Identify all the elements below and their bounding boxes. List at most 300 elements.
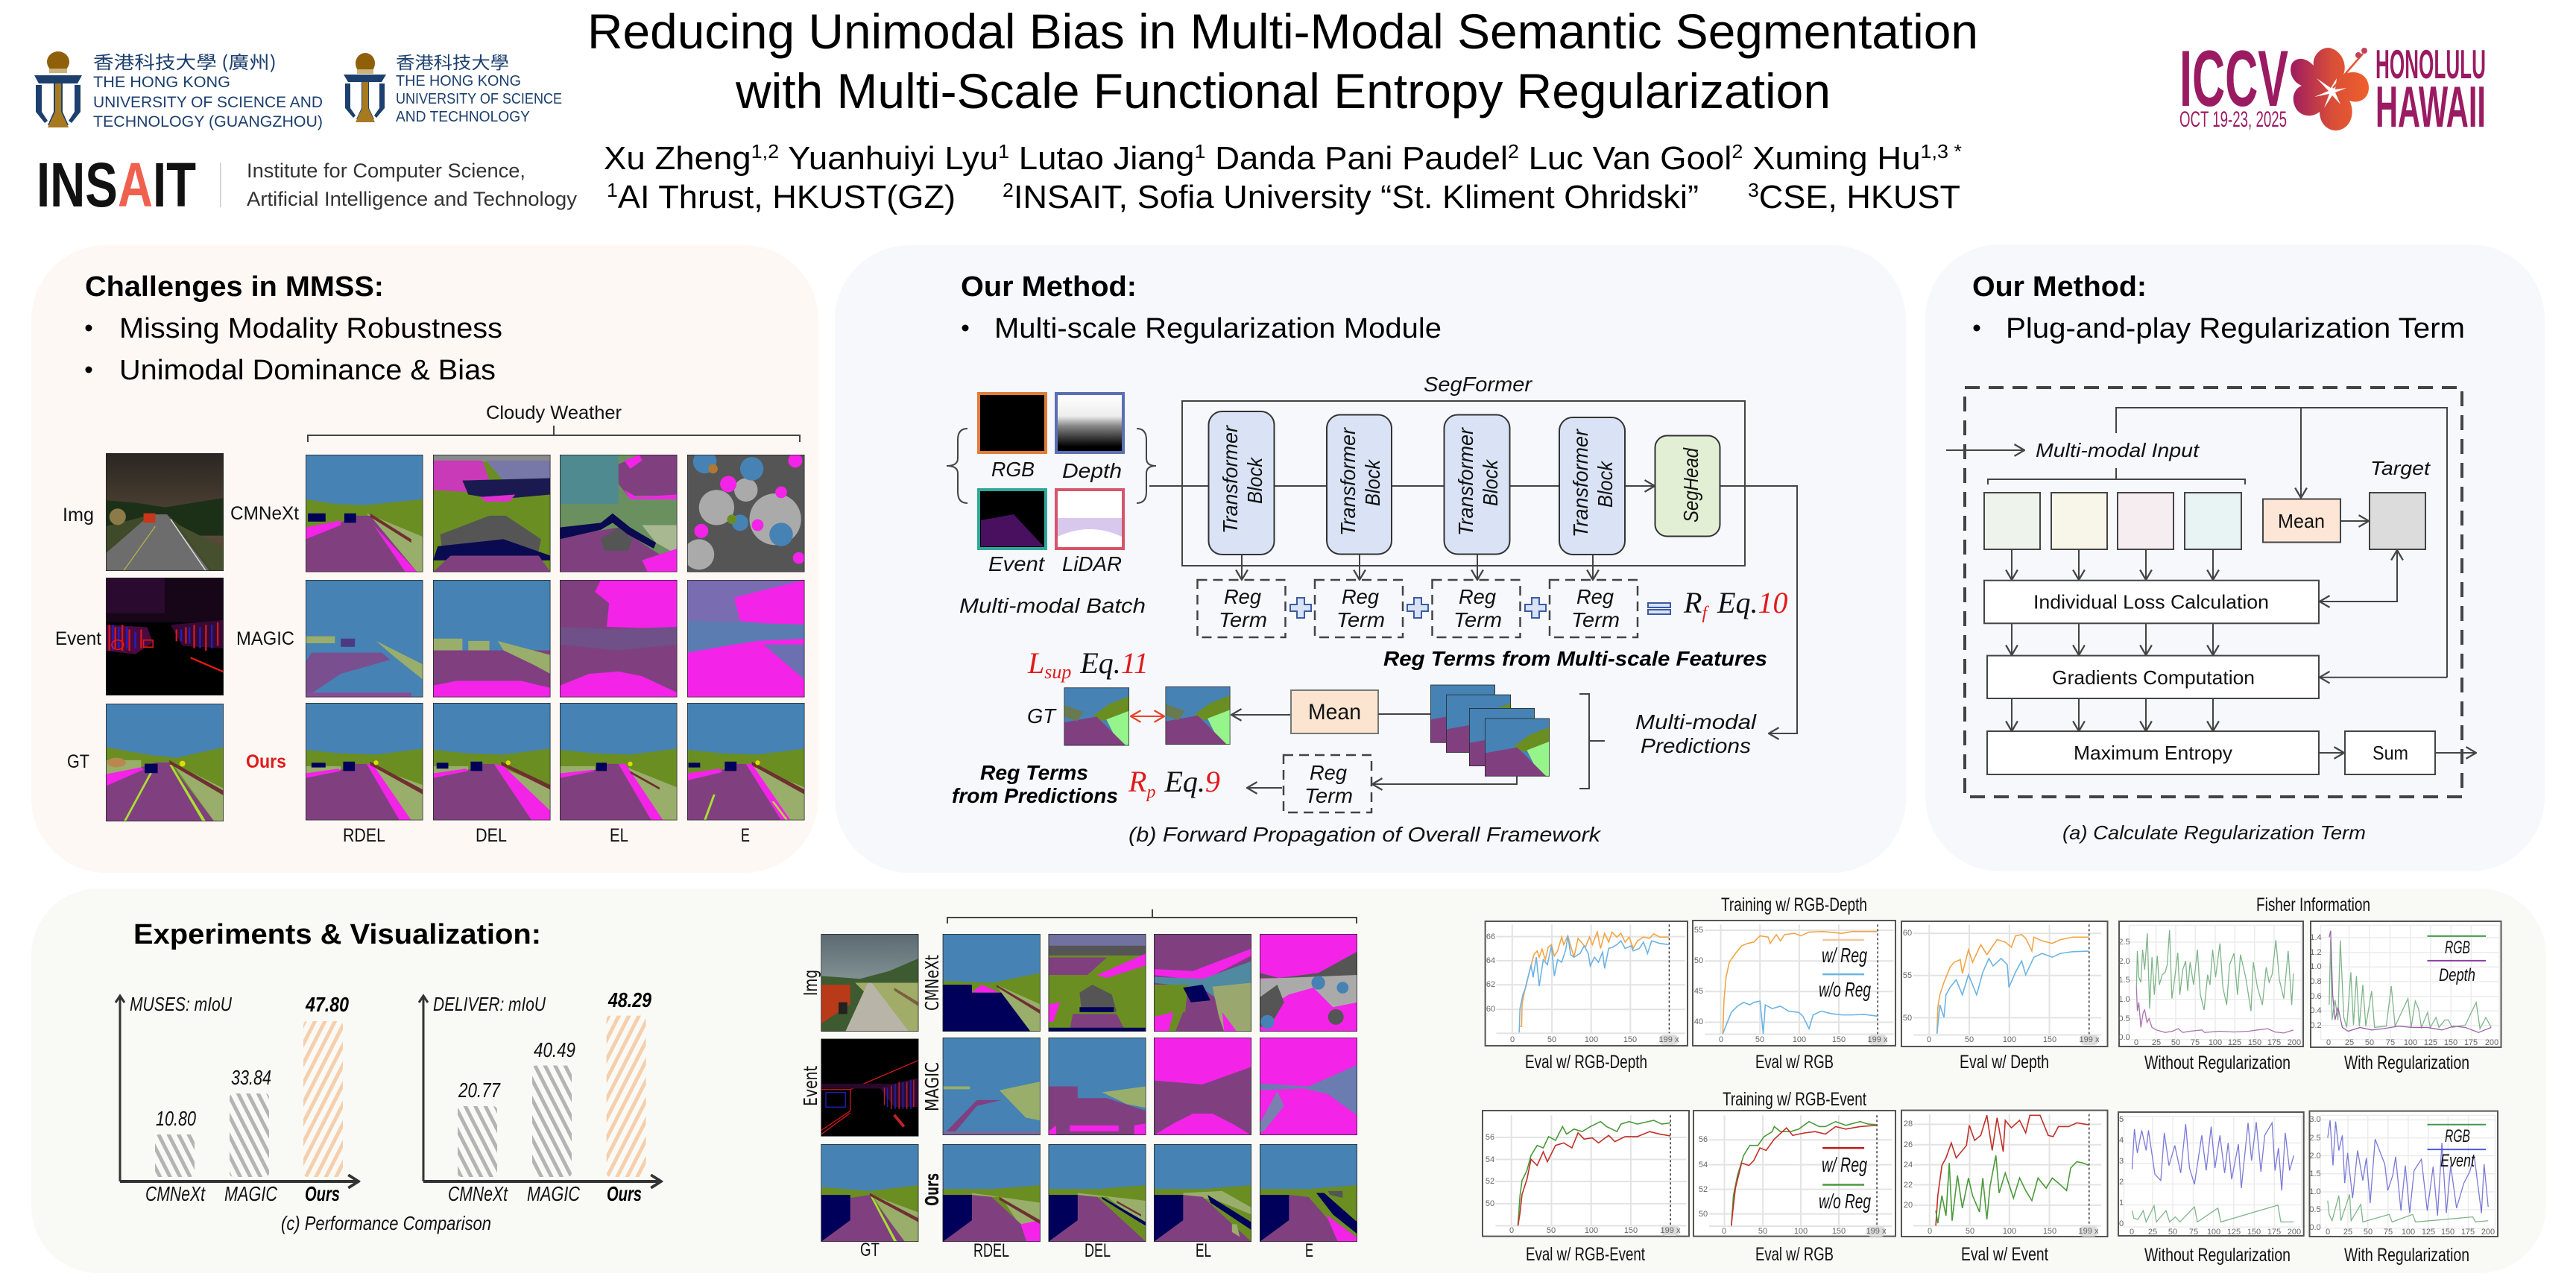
chart: Fisher with regularization, RGB-Depth: 125 bbox=[2424, 1038, 2437, 1047]
equation: L_sup Eq.11: Eq. bbox=[1079, 646, 1121, 680]
chart: eval Depth: 150 bbox=[2043, 1035, 2056, 1044]
bar chart: MUSES mIoU: 33.84 bbox=[231, 1066, 271, 1089]
chart: Fisher with regularization, RGB-Event: 50 bbox=[2364, 1228, 2373, 1237]
segmentation: Ours RDEL bbox=[306, 703, 423, 820]
chart: eval RGB-Depth: 199 x bbox=[1659, 1035, 1679, 1044]
chart: Fisher with regularization, RGB-Depth: 75 bbox=[2386, 1038, 2395, 1047]
authors and affiliations: 2 bbox=[1731, 140, 1743, 162]
box: sum bbox=[2345, 731, 2435, 774]
chart: eval RGB-Event: 56 bbox=[1486, 1133, 1494, 1142]
segmentation: Ours DEL bbox=[1048, 1144, 1146, 1242]
thumbnail: GT bbox=[1064, 687, 1129, 745]
caption c: (c) Performance Comparison bbox=[281, 1212, 491, 1234]
transformer block 3 bbox=[1445, 414, 1510, 555]
equation: L_sup Eq.11: 11 bbox=[1121, 646, 1149, 680]
chart: Fisher with regularization, RGB-Depth: 0.6 bbox=[2310, 992, 2322, 1001]
chart: Fisher with regularization, RGB-Event: 100 bbox=[2402, 1228, 2415, 1237]
reg term 1 bbox=[1197, 580, 1285, 637]
chart: eval RGB-Event: 100 bbox=[1585, 1226, 1598, 1235]
authors and affiliations: 3 bbox=[1748, 179, 1759, 201]
chart: Fisher with regularization, RGB-Depth: 1.2 bbox=[2310, 948, 2322, 957]
chart: Fisher without regularization, RGB-Event: 0 bbox=[2119, 1219, 2124, 1228]
segmentation: CMNeXt RDEL bbox=[306, 455, 423, 572]
chart captions: RGB-Event row: Eval w/ RGB bbox=[1755, 1244, 1834, 1265]
segmentation: Ours EL bbox=[560, 703, 677, 820]
chart: Fisher without regularization, RGB-Depth: 125 bbox=[2228, 1038, 2241, 1047]
transformer block 1 bbox=[1209, 411, 1275, 555]
column labels: DEL bbox=[476, 825, 507, 846]
chart: eval RGB, RGB-Depth training: 0 bbox=[1719, 1035, 1723, 1044]
feature reg terms row: Reg Terms from Multi-scale Features bbox=[1383, 647, 1767, 670]
chart: Fisher without regularization, RGB-Depth: 0.5 bbox=[2118, 1014, 2130, 1023]
segmentation: MAGIC E bbox=[687, 580, 805, 698]
chart: eval RGB, RGB-Event training: 0 bbox=[1722, 1227, 1726, 1236]
title: Reducing Unimodal Bias in Multi-Modal Semantic Segmentation bbox=[587, 4, 1978, 59]
chart: eval RGB, RGB-Event training: 100 bbox=[1794, 1227, 1808, 1236]
logo: HKUST (Guangzhou) bbox=[34, 48, 323, 130]
equation: R_p Eq.9: p bbox=[1145, 783, 1155, 802]
reg term 1: Reg bbox=[1224, 585, 1261, 608]
chart: Fisher without regularization, RGB-Event: 25 bbox=[2148, 1228, 2157, 1237]
chart: eval Event: 199 x bbox=[2079, 1227, 2099, 1236]
bullet list: challenges: Missing Modality Robustness bbox=[119, 313, 502, 344]
equation: R_f Eq.10: R bbox=[1684, 586, 1702, 619]
chart: eval RGB, RGB-Depth training: 199 x bbox=[1868, 1035, 1888, 1044]
row labels: modalities and methods: Ours bbox=[246, 751, 286, 772]
row labels: modalities and methods: GT bbox=[67, 751, 89, 772]
input: event bbox=[979, 490, 1046, 575]
stacked multi-modal predictions bbox=[1430, 685, 1757, 789]
row labels: modalities and methods: Img bbox=[63, 505, 94, 525]
authors and affiliations: 2 bbox=[1508, 140, 1519, 162]
chart captions: RGB-Event row: Eval w/ RGB-Event bbox=[1526, 1244, 1645, 1265]
equation: R_f Eq.10: Eq. bbox=[1717, 586, 1758, 619]
reg term 3 bbox=[1433, 580, 1521, 637]
authors and affiliations: CSE, HKUST bbox=[1759, 179, 1960, 215]
bullet: plug-and-play term: Plug-and-play Regularization Term bbox=[2006, 313, 2465, 344]
chart: eval RGB, RGB-Depth training: 150 bbox=[1832, 1035, 1846, 1044]
chart: Fisher with regularization, RGB-Event: 0.5 bbox=[2309, 1205, 2321, 1214]
row labels: modalities and methods: Event bbox=[55, 628, 101, 649]
chart: eval Event: 150 bbox=[2043, 1227, 2056, 1236]
chart: Fisher without regularization, RGB-Depth: 2.5 bbox=[2118, 938, 2130, 947]
multi-modal input label and arrow: Multi-modal Input bbox=[2036, 439, 2200, 461]
chart: eval Event: 24 bbox=[1904, 1161, 1913, 1169]
chart: Fisher without regularization, RGB-Depth: 25 bbox=[2152, 1038, 2161, 1047]
heading: training with RGB-Event: Training w/ RGB-Event bbox=[1723, 1089, 1866, 1110]
rotated row labels bbox=[800, 955, 943, 1206]
chart: eval Event bbox=[1901, 1111, 2108, 1237]
prediction reg term bbox=[1247, 755, 1517, 812]
authors and affiliations: 1 bbox=[607, 179, 618, 201]
caption b: (b) Forward Propagation of Overall Framework bbox=[1128, 823, 1602, 846]
heading: training with RGB-Depth: Training w/ RGB-Depth bbox=[1721, 894, 1867, 915]
chart: Fisher without regularization, RGB-Event: 150 bbox=[2247, 1228, 2261, 1237]
bar chart: DELIVER mIoU: 40.49 bbox=[534, 1038, 575, 1061]
braces bbox=[947, 429, 1156, 503]
chart: Fisher without regularization, RGB-Event: 125 bbox=[2227, 1228, 2241, 1237]
logo: ICCV Honolulu Hawaii: OCT 19-23, 2025 bbox=[2179, 107, 2287, 132]
title bbox=[587, 4, 1978, 119]
logo: HKUST: THE HONG KONG bbox=[396, 73, 521, 89]
chart: eval RGB, RGB-Depth training: 50 bbox=[1755, 1035, 1764, 1044]
segmentation: MAGIC RDEL bbox=[306, 580, 423, 698]
multi-modal batch inputs: Multi-modal Batch bbox=[959, 594, 1146, 617]
rotated row labels: MAGIC bbox=[921, 1062, 943, 1111]
chart: eval Event: 22 bbox=[1904, 1181, 1913, 1190]
chart: eval Event: 0 bbox=[1928, 1227, 1932, 1236]
chart: eval RGB-Depth: 60 bbox=[1486, 1005, 1495, 1014]
authors and affiliations: 1 bbox=[1194, 140, 1205, 162]
chart: eval RGB-Depth: 64 bbox=[1486, 956, 1495, 965]
box: mean: Mean bbox=[2278, 510, 2325, 532]
chart captions: Fisher bottom row: With Regularization bbox=[2344, 1245, 2469, 1266]
SegHead block bbox=[1655, 435, 1720, 537]
box: sum: Sum bbox=[2373, 742, 2408, 764]
rotated row labels: Ours bbox=[921, 1173, 943, 1206]
GT and prediction comparison bbox=[1027, 686, 1430, 745]
chart: eval RGB, RGB-Event training: 199 x bbox=[1866, 1227, 1887, 1236]
reg term 2 bbox=[1315, 580, 1403, 637]
chart: Fisher without regularization, RGB-Event: 100 bbox=[2207, 1228, 2220, 1237]
caption a: (a) Calculate Regularization Term bbox=[2062, 821, 2366, 844]
box: target: Target bbox=[2370, 457, 2431, 479]
reg term 2: Term bbox=[1336, 608, 1385, 631]
chart: eval RGB-Event bbox=[1483, 1111, 1689, 1237]
panel: our method, multi-scale regularization bbox=[835, 245, 1906, 873]
chart: Fisher with regularization, RGB-Event: 1.5 bbox=[2309, 1169, 2321, 1178]
heading: challenges: Challenges in MMSS: bbox=[85, 271, 384, 303]
chart: eval RGB, RGB-Event training: 50 bbox=[1699, 1210, 1708, 1219]
chart: Fisher with regularization, RGB-Depth: 0.8 bbox=[2310, 977, 2322, 986]
bar chart: DELIVER mIoU bbox=[419, 988, 661, 1205]
logo: INSAIT: Artificial Intelligence and Technology bbox=[247, 188, 577, 210]
chart: eval RGB, RGB-Depth training: 50 bbox=[1694, 956, 1703, 965]
column labels: visualization grid: E bbox=[1305, 1240, 1313, 1261]
chart: Fisher without regularization, RGB-Depth: 150 bbox=[2248, 1038, 2261, 1047]
chart: Fisher with regularization, RGB-Event: 200 bbox=[2481, 1228, 2495, 1237]
chart: eval RGB-Depth: 66 bbox=[1486, 932, 1495, 941]
column labels: visualization grid: DEL bbox=[1085, 1240, 1111, 1261]
authors and affiliations: 1,2 bbox=[751, 140, 779, 162]
segmentation: CMNeXt DEL bbox=[433, 455, 550, 572]
bar chart: DELIVER mIoU: MAGIC bbox=[527, 1182, 581, 1205]
chart: Fisher without regularization, RGB-Depth: 175 bbox=[2267, 1038, 2281, 1047]
chart: eval RGB, RGB-Depth training: w/ Reg bbox=[1822, 944, 1867, 967]
transformer block 4: Transformer bbox=[1569, 428, 1592, 537]
chart: eval Depth bbox=[1901, 921, 2108, 1046]
column labels: visualization grid: GT bbox=[860, 1240, 880, 1260]
chart: Fisher with regularization, RGB-Depth: 175 bbox=[2464, 1038, 2478, 1047]
box: mean bbox=[1291, 690, 1378, 733]
chart: eval Event: 26 bbox=[1904, 1140, 1913, 1149]
chart: eval RGB-Event: 50 bbox=[1547, 1226, 1556, 1235]
chart: eval RGB-Event: 199 x bbox=[1661, 1226, 1681, 1235]
bar chart: MUSES mIoU bbox=[116, 993, 359, 1205]
chart: eval RGB, RGB-Depth training: 45 bbox=[1694, 987, 1703, 996]
authors and affiliations: INSAIT, Sofia University “St. Kliment Ohridski” bbox=[1014, 179, 1699, 215]
column labels: visualization grid bbox=[860, 1240, 1313, 1261]
chart: eval RGB-Event: 0 bbox=[1509, 1226, 1514, 1235]
chart: Fisher with regularization, RGB-Event: Event bbox=[2440, 1151, 2475, 1171]
heading: our method: Our Method: bbox=[1972, 271, 2147, 303]
chart: eval RGB-Depth: 0 bbox=[1510, 1035, 1515, 1044]
input: event: Event bbox=[988, 552, 1045, 575]
chart: eval Depth: 50 bbox=[1965, 1035, 1974, 1044]
label: reg terms from predictions bbox=[952, 761, 1118, 807]
chart: Fisher with regularization, RGB-Event bbox=[2309, 1111, 2498, 1237]
reg term 2: Reg bbox=[1342, 585, 1379, 608]
chart: eval Depth: 55 bbox=[1903, 971, 1912, 980]
chart: Fisher without regularization, RGB-Event: 2 bbox=[2119, 1178, 2124, 1187]
rotated row labels: CMNeXt bbox=[921, 955, 943, 1011]
multi-modal batch inputs bbox=[947, 394, 1156, 617]
segmentation: Ours DEL bbox=[433, 703, 550, 820]
heading: Fisher information: Fisher Information bbox=[2256, 894, 2370, 915]
SegFormer backbone bbox=[1149, 373, 1797, 733]
chart: eval RGB-Event: 52 bbox=[1486, 1177, 1494, 1186]
chart: eval RGB-Event: 150 bbox=[1624, 1226, 1638, 1235]
chart: eval Depth: 60 bbox=[1903, 929, 1912, 938]
chart: eval RGB-Event: 54 bbox=[1486, 1155, 1494, 1164]
bracket: cloudy weather bbox=[308, 402, 800, 442]
bullet list: challenges bbox=[85, 313, 502, 386]
SegHead block: SegHead bbox=[1679, 447, 1702, 523]
segmentation: MAGIC E bbox=[1260, 1038, 1357, 1135]
equation: L_sup Eq.11: sup bbox=[1044, 661, 1071, 683]
dashed module frame bbox=[1965, 388, 2462, 797]
stacked multi-modal predictions: Multi-modal bbox=[1635, 710, 1757, 733]
multi-modal input label and arrow bbox=[1946, 408, 2447, 678]
transformer block 2: Block bbox=[1361, 458, 1384, 506]
equation: R_f Eq.10: 10 bbox=[1758, 586, 1788, 619]
chart: Fisher without regularization, RGB-Depth bbox=[2118, 921, 2303, 1047]
chart: Fisher without regularization, RGB-Depth: 50 bbox=[2171, 1038, 2180, 1047]
authors and affiliations: Xu Zheng bbox=[604, 140, 746, 177]
chart: eval Depth: 50 bbox=[1903, 1014, 1912, 1023]
logo: HKUST bbox=[344, 48, 562, 125]
segmentation: Ours RDEL bbox=[943, 1144, 1041, 1242]
chart: Fisher without regularization, RGB-Event: 75 bbox=[2189, 1228, 2198, 1237]
plus and equals icons bbox=[1290, 598, 1670, 618]
box: maximum entropy: Maximum Entropy bbox=[2074, 742, 2232, 764]
SegFormer backbone: SegFormer bbox=[1424, 373, 1533, 396]
chart: Fisher with regularization, RGB-Event: 150 bbox=[2441, 1228, 2455, 1237]
chart: Fisher with regularization, RGB-Depth: RGB bbox=[2445, 938, 2470, 958]
reg term 4: Reg bbox=[1576, 585, 1614, 608]
chart: Fisher with regularization, RGB-Depth: 1.0 bbox=[2310, 962, 2322, 971]
chart: Fisher without regularization, RGB-Depth: 200 bbox=[2288, 1038, 2301, 1047]
chart: eval RGB-Depth: 150 bbox=[1623, 1035, 1637, 1044]
chart: Fisher with regularization, RGB-Event: 0.0 bbox=[2309, 1223, 2321, 1232]
authors and affiliations bbox=[604, 140, 1962, 215]
segmentation: Ours E bbox=[1260, 1144, 1357, 1242]
chart: eval RGB, RGB-Event training: 50 bbox=[1758, 1227, 1767, 1236]
chart captions: RGB-Depth row bbox=[1525, 1052, 2049, 1073]
bar chart: DELIVER mIoU: Ours bbox=[607, 1182, 642, 1205]
logo: HKUST (Guangzhou): UNIVERSITY OF SCIENCE AND bbox=[93, 94, 323, 111]
chart captions: RGB-Event row: Eval w/ Event bbox=[1961, 1244, 2048, 1265]
authors and affiliations: AI Thrust, HKUST(GZ) bbox=[618, 179, 956, 215]
chart: Fisher with regularization, RGB-Event: 3.0 bbox=[2309, 1115, 2321, 1124]
panel: experiments and visualization bbox=[31, 888, 2546, 1273]
chart: Fisher with regularization, RGB-Depth: 200 bbox=[2485, 1038, 2498, 1047]
panel: challenges in MMSS bbox=[31, 245, 818, 873]
chart: Fisher with regularization, RGB-Depth: 0 bbox=[2326, 1038, 2331, 1047]
stacked multi-modal predictions: Predictions bbox=[1641, 734, 1751, 757]
chart: eval Event: 20 bbox=[1904, 1201, 1913, 1210]
segmentation: Ours E bbox=[687, 703, 805, 820]
chart captions: Fisher top row: With Regularization bbox=[2344, 1052, 2469, 1073]
chart: Fisher without regularization, RGB-Depth: 75 bbox=[2191, 1038, 2200, 1047]
box: mean: Mean bbox=[1308, 700, 1361, 724]
chart: Fisher without regularization, RGB-Depth: 1.5 bbox=[2118, 976, 2130, 985]
chart: Fisher with regularization, RGB-Depth: 1.4 bbox=[2310, 933, 2322, 942]
chart: Fisher with regularization, RGB-Event: 2.5 bbox=[2309, 1134, 2321, 1143]
authors and affiliations: Yuanhuiyi Lyu bbox=[779, 140, 998, 177]
chart captions: RGB-Event row bbox=[1526, 1244, 2048, 1265]
equation: R_f Eq.10: f bbox=[1702, 604, 1709, 623]
chart: eval RGB-Depth: 100 bbox=[1585, 1035, 1598, 1044]
thumbnail: averaged prediction bbox=[1166, 686, 1230, 745]
column labels: RDEL bbox=[343, 825, 385, 846]
bullet: multi-scale regularization module: Multi-scale Regularization Module bbox=[994, 313, 1442, 344]
chart: Fisher with regularization, RGB-Event: 1.0 bbox=[2309, 1187, 2321, 1196]
logo: ICCV Honolulu Hawaii bbox=[2179, 34, 2486, 139]
chart: Fisher with regularization, RGB-Depth: 100 bbox=[2404, 1038, 2417, 1047]
chart: Fisher with regularization, RGB-Event: 0 bbox=[2326, 1228, 2330, 1237]
equation: R_p Eq.9: Eq. bbox=[1164, 765, 1205, 798]
transformer block 1: Transformer bbox=[1219, 424, 1242, 534]
chart: Fisher without regularization, RGB-Depth: 2.0 bbox=[2118, 957, 2130, 966]
reg term 4: Term bbox=[1571, 608, 1620, 631]
input: depth: Depth bbox=[1062, 459, 1122, 482]
chart: Fisher without regularization, RGB-Depth: 100 bbox=[2209, 1038, 2222, 1047]
chart: Fisher without regularization, RGB-Event: 0 bbox=[2130, 1228, 2134, 1237]
chart: Fisher without regularization, RGB-Depth: 1.0 bbox=[2118, 995, 2130, 1004]
chart: eval Event: 50 bbox=[1966, 1227, 1974, 1236]
prediction reg term: Term bbox=[1304, 784, 1353, 807]
input: RGB: RGB bbox=[991, 458, 1035, 481]
chart: eval RGB, RGB-Event training bbox=[1693, 1111, 1895, 1237]
chart: eval RGB-Depth: 50 bbox=[1547, 1035, 1556, 1044]
chart captions: RGB-Depth row: Eval w/ RGB bbox=[1755, 1052, 1834, 1073]
transformer block 3: Transformer bbox=[1454, 426, 1477, 536]
box: maximum entropy bbox=[1987, 731, 2319, 774]
chart: Fisher with regularization, RGB-Event: 125 bbox=[2422, 1228, 2435, 1237]
equation: R_p Eq.9: R bbox=[1128, 765, 1146, 798]
transformer block 2 bbox=[1327, 414, 1392, 555]
input: RGB bbox=[979, 394, 1046, 481]
logo: HKUST: 香港科技大學 bbox=[396, 48, 509, 74]
chart: eval Depth: 100 bbox=[2003, 1035, 2016, 1044]
heading: our method: Our Method: bbox=[961, 271, 1137, 303]
box: mean bbox=[2263, 499, 2340, 543]
reg term 3: Term bbox=[1453, 608, 1502, 631]
chart: Fisher with regularization, RGB-Depth: 25 bbox=[2345, 1038, 2354, 1047]
box: gradients computation bbox=[1987, 656, 2319, 698]
transformer block 4 bbox=[1559, 417, 1625, 555]
arrows: squares to loss, loss to gradients, gradients to entropy bbox=[2012, 549, 2397, 731]
bar chart: DELIVER mIoU: 20.77 bbox=[458, 1079, 501, 1102]
segmentation: CMNeXt E bbox=[684, 450, 805, 572]
row labels: modalities and methods: CMNeXt bbox=[230, 503, 299, 524]
chart: eval Event: 100 bbox=[2003, 1227, 2016, 1236]
chart captions: Fisher top row: Without Regularization bbox=[2144, 1052, 2291, 1073]
reg term 1: Term bbox=[1219, 608, 1267, 631]
label: reg terms from predictions: from Predictions bbox=[952, 784, 1118, 807]
segmentation: MAGIC EL bbox=[1154, 1038, 1251, 1135]
chart: Fisher with regularization, RGB-Depth bbox=[2310, 921, 2501, 1047]
chart: Fisher with regularization, RGB-Event: 75 bbox=[2384, 1228, 2393, 1237]
chart: eval RGB, RGB-Event training: w/ Reg bbox=[1822, 1153, 1867, 1176]
chart: Fisher without regularization, RGB-Event: 4 bbox=[2119, 1136, 2124, 1145]
transformer block 1: Block bbox=[1243, 456, 1266, 504]
GT and prediction comparison: GT bbox=[1027, 704, 1057, 727]
box: individual loss calculation bbox=[1984, 581, 2319, 623]
transformer block 4: Block bbox=[1594, 460, 1617, 508]
chart: eval RGB, RGB-Event training: w/o Reg bbox=[1819, 1190, 1871, 1213]
heading: experiments: Experiments & Visualization: bbox=[133, 919, 541, 950]
bar chart: DELIVER mIoU: DELIVER: mIoU bbox=[433, 993, 546, 1015]
chart: Fisher without regularization, RGB-Event: 5 bbox=[2119, 1115, 2124, 1124]
chart: Fisher with regularization, RGB-Event: 25 bbox=[2343, 1228, 2352, 1237]
bar chart: MUSES mIoU: CMNeXt bbox=[145, 1182, 206, 1205]
reg term 4 bbox=[1550, 580, 1638, 637]
chart captions: Fisher bottom row bbox=[2144, 1245, 2469, 1266]
chart: Fisher without regularization, RGB-Depth: 0.0 bbox=[2118, 1033, 2130, 1042]
segmentation: CMNeXt EL bbox=[1154, 934, 1251, 1032]
column labels: visualization grid: RDEL bbox=[973, 1240, 1009, 1261]
transformer block 2: Transformer bbox=[1336, 426, 1360, 536]
chart: Fisher without regularization, RGB-Event: 50 bbox=[2168, 1228, 2177, 1237]
prediction reg term: Reg bbox=[1310, 761, 1347, 784]
rotated row labels: Event bbox=[800, 1066, 821, 1106]
chart: Fisher with regularization, RGB-Depth: 50 bbox=[2365, 1038, 2374, 1047]
authors and affiliations: 1 bbox=[998, 140, 1009, 162]
authors and affiliations: Luc Van Gool bbox=[1519, 140, 1731, 177]
bar chart: DELIVER mIoU: 48.29 bbox=[607, 988, 651, 1011]
column labels: visualization grid: EL bbox=[1196, 1240, 1211, 1261]
column labels: EL bbox=[610, 825, 628, 846]
box: target bbox=[2370, 457, 2431, 549]
chart: Fisher with regularization, RGB-Depth: Depth bbox=[2439, 965, 2475, 985]
chart captions: Fisher top row bbox=[2144, 1052, 2469, 1073]
chart: Fisher without regularization, RGB-Event bbox=[2118, 1112, 2304, 1237]
chart: Fisher with regularization, RGB-Depth: 0.4 bbox=[2310, 1006, 2322, 1015]
bar chart: DELIVER mIoU: CMNeXt bbox=[448, 1182, 508, 1205]
segmentation: CMNeXt EL bbox=[560, 455, 677, 572]
chart: eval RGB, RGB-Event training: 52 bbox=[1699, 1185, 1708, 1194]
chart: eval RGB, RGB-Depth training: w/o Reg bbox=[1819, 978, 1871, 1001]
authors and affiliations: 1,3 * bbox=[1921, 140, 1962, 162]
image: event frame with truck bbox=[821, 1039, 918, 1137]
chart: Fisher with regularization, RGB-Depth: 0.2 bbox=[2310, 1021, 2322, 1030]
image: RGB photo bbox=[106, 453, 224, 571]
chart: Fisher with regularization, RGB-Event: 175 bbox=[2461, 1228, 2475, 1237]
column labels bbox=[343, 825, 750, 846]
authors and affiliations: Danda Pani Paudel bbox=[1205, 140, 1508, 177]
bar chart: MUSES mIoU: MAGIC bbox=[224, 1182, 278, 1205]
logo: INSAIT: INSAIT bbox=[37, 150, 196, 220]
equation: R_p Eq.9: 9 bbox=[1205, 765, 1220, 798]
logo: INSAIT bbox=[37, 150, 577, 220]
chart: Fisher without regularization, RGB-Event: 1 bbox=[2119, 1199, 2124, 1208]
chart: eval RGB-Depth: 62 bbox=[1486, 980, 1495, 989]
reg term 3: Reg bbox=[1459, 585, 1496, 608]
segmentation: MAGIC EL bbox=[560, 580, 677, 698]
row labels: modalities and methods: MAGIC bbox=[236, 628, 294, 649]
